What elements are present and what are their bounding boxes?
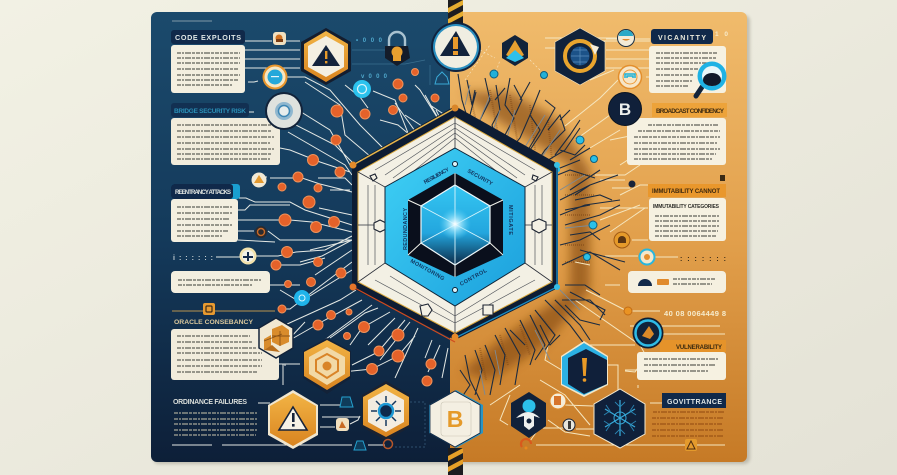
icon: square marker and dot [628, 175, 725, 188]
icon: orange spiral [521, 439, 531, 450]
text card: vicanity [649, 46, 726, 93]
heading: broadcast confidency [652, 103, 727, 117]
icon: small hazard badges [336, 397, 392, 450]
labels: cyan band text: REDUNDANCY [403, 208, 409, 250]
heading: governance [662, 393, 726, 408]
text card: short note right [628, 271, 726, 293]
dotted label right: : : : : : : : [680, 256, 726, 263]
icon: small cyan house [435, 72, 449, 84]
icon: alert hexagon [561, 341, 608, 397]
heading: code exploits [171, 30, 245, 44]
labels: cyan band text [403, 167, 513, 288]
heading: broadcast confidency: BROADCAST CONFIDENCY [656, 108, 725, 115]
heading: vulnerability top: VICANITTY [658, 35, 706, 42]
heading: vulnerability: VULNERABILITY [676, 345, 722, 351]
panel: right orange [450, 12, 747, 462]
circuit wires: right [465, 38, 725, 445]
labels: cyan band text: MONITORING [409, 259, 445, 282]
hazard stripe bottom [448, 448, 463, 475]
icon: ring [618, 66, 642, 88]
circuit wires: left [172, 21, 448, 447]
icon: gold coin [614, 232, 630, 248]
heading: oracle consebancy: ORACLE CONSEBANCY [174, 319, 253, 326]
icon: cyan ring small [640, 250, 654, 264]
icon: large bitcoin hexagon: B [447, 406, 463, 432]
text card: immutability [649, 198, 726, 241]
text block: governance [652, 412, 724, 436]
labels: cyan band text: CONTROL [459, 268, 489, 288]
heading: vulnerability top [651, 29, 713, 44]
brown root hatching [470, 90, 595, 380]
label: dotted code upper: • 0 0 0 [356, 38, 383, 44]
labels: cyan band text: MITIGATE [507, 205, 513, 235]
hexagon: white ring [358, 117, 552, 333]
heading: governance: GOVITTRANCE [667, 399, 722, 406]
icon: orange warning box [685, 439, 697, 451]
icon: orange dot [624, 307, 632, 315]
heading: immutability cannot: IMMUTABILITY CANNOT [652, 189, 720, 195]
text card: immutability: IMMUTABILITY CATEGORIES [653, 204, 720, 210]
icon: large bitcoin hexagon [429, 390, 483, 448]
heading: second section [171, 103, 249, 117]
heading: ordinance failures: ORDINANCE FAILURES [173, 399, 247, 406]
text card: broadcast [627, 118, 726, 165]
icon: hexagon warning [301, 28, 351, 85]
heading: reentrancy attacks [171, 184, 240, 199]
icon: cyan token [353, 80, 371, 98]
hexagon: cyan band [385, 148, 525, 306]
label: dotted code lower: v 0 0 0 [361, 74, 388, 80]
icon: dark bird ring [632, 318, 664, 348]
icon: padlock [385, 32, 410, 66]
text card: oracle [171, 329, 279, 380]
icon: bitcoin dark: B [619, 100, 631, 119]
icon: orange stamp [550, 393, 566, 409]
icon: spiral [255, 226, 267, 238]
labels: cyan band text: RESILIENCY [423, 167, 451, 186]
icon: oracle boxes hexagon [259, 318, 293, 358]
heading: vulnerability [660, 340, 726, 352]
hexagon corner nodes [350, 104, 560, 340]
heading: code exploits: CODE EXPLOITS [175, 33, 241, 42]
panel: left navy [151, 12, 450, 462]
label: number top: 1 0 [715, 31, 728, 38]
icon: small triangle circle [252, 172, 266, 188]
text card: short note [171, 271, 270, 293]
hexagon: glowing cube [421, 185, 490, 265]
icon: ring with cyan card [264, 66, 286, 88]
heading: second section: BRIDGE SECURITY RISK [174, 108, 246, 115]
icon: orange square badge [203, 303, 215, 315]
icon: small teal circle [618, 30, 634, 46]
hexagon: outer navy frame [352, 106, 558, 342]
dotted label: i : : : : : : [173, 255, 213, 262]
label: number row: 40 08 0064449 8 [664, 309, 726, 318]
icon: arrow badge [502, 35, 528, 66]
icon: snowflake hexagon [594, 389, 645, 448]
hazard stripe top [448, 0, 463, 24]
icon: cyan token lower [294, 290, 310, 306]
text card: reentrancy attacks [171, 199, 238, 242]
central hexagon [350, 104, 560, 342]
cracked roots: right [458, 74, 625, 400]
icon: magnifier [696, 62, 726, 96]
icon: grey gear circle [265, 92, 303, 130]
text card: second section [171, 118, 280, 165]
icon: small tag [563, 419, 575, 431]
icon: small orange badge [273, 32, 286, 45]
text card: vulnerability [637, 352, 726, 380]
text card: code exploits [171, 45, 245, 93]
labels: cyan band text: SECURITY [466, 169, 494, 187]
heading: immutability cannot [648, 184, 726, 197]
orange circuit nodes: left [271, 68, 439, 386]
icon: cyan root nodes [490, 70, 598, 260]
icon: shield hexagon [511, 392, 546, 438]
icon: large warning circle [431, 22, 481, 72]
icon: globe hexagon [555, 28, 605, 85]
icon: concentric orange hexagon [303, 338, 351, 394]
icon: plus circle [240, 248, 256, 264]
heading: reentrancy attacks: REENTRANCY ATTACKS [175, 190, 231, 196]
icon: bitcoin dark [608, 92, 642, 126]
hexagon: black ring [408, 162, 503, 292]
text block: ordinance failures [174, 413, 258, 435]
icon: sun hexagon [362, 381, 410, 441]
icon: warning hexagon orange [268, 390, 318, 449]
